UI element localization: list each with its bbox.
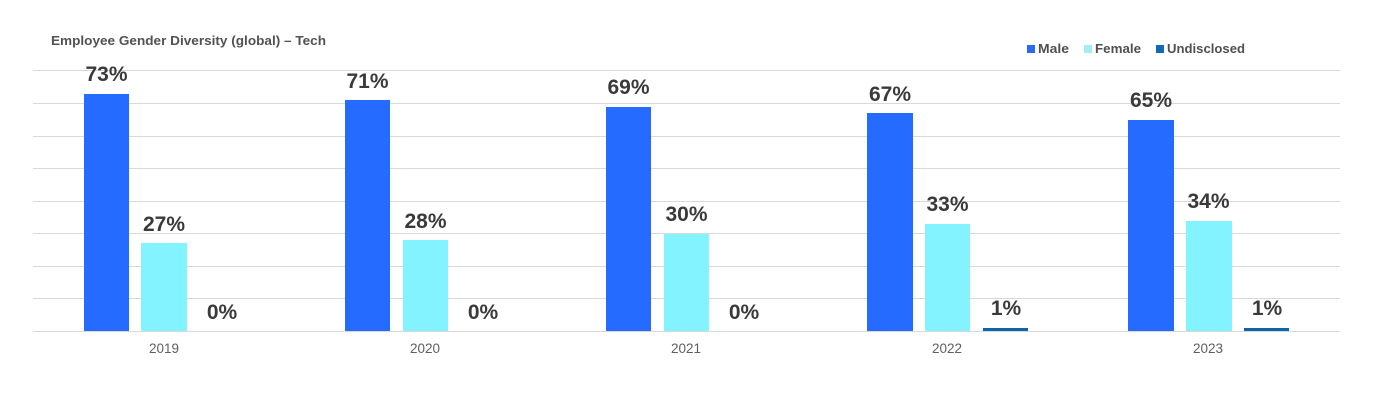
bar group: 2023: 34%: [1187, 190, 1230, 213]
legend: female: Female: [1095, 41, 1141, 56]
legend: male: [1027, 41, 1069, 56]
bar group: 2022: 33%: [926, 193, 969, 216]
bar group: 2021: [606, 76, 759, 356]
bar group: 2023: 1%: [1252, 297, 1282, 320]
bar group: 2023: 65%: [1130, 89, 1172, 112]
bar group: 2023: [1128, 89, 1289, 356]
bar group: 2020: [345, 70, 498, 356]
bar group: 2023: 2023: [1193, 341, 1223, 356]
bar group: 2022: [867, 83, 1028, 356]
bar group: 2021: 2021: [671, 341, 701, 356]
bar group: 2022: 2022: [932, 341, 962, 356]
bar group: 2022: 67%: [869, 83, 911, 106]
bar group: 2021: 30%: [665, 203, 708, 226]
bar group: 2020: 0%: [468, 301, 498, 324]
bar group: 2019: [84, 63, 237, 356]
bar group: 2022: 1%: [991, 297, 1021, 320]
bar group: 2019: 2019: [149, 341, 179, 356]
bar group: 2019: 0%: [207, 301, 237, 324]
bar group: 2019: 73%: [85, 63, 128, 86]
legend: undisclosed: Undisclosed: [1167, 41, 1245, 56]
title: Employee Gender Diversity (global) – Tech: [51, 33, 326, 48]
bar group: 2019: 27%: [143, 213, 185, 236]
bar group: 2020: 2020: [410, 341, 440, 356]
bar group: 2021: 0%: [729, 301, 759, 324]
bar group: 2021: 69%: [607, 76, 650, 99]
legend: male: Male: [1038, 41, 1069, 56]
bar group: 2020: 71%: [346, 70, 389, 93]
legend: [1027, 41, 1245, 56]
bar group: 2020: 28%: [404, 210, 447, 233]
